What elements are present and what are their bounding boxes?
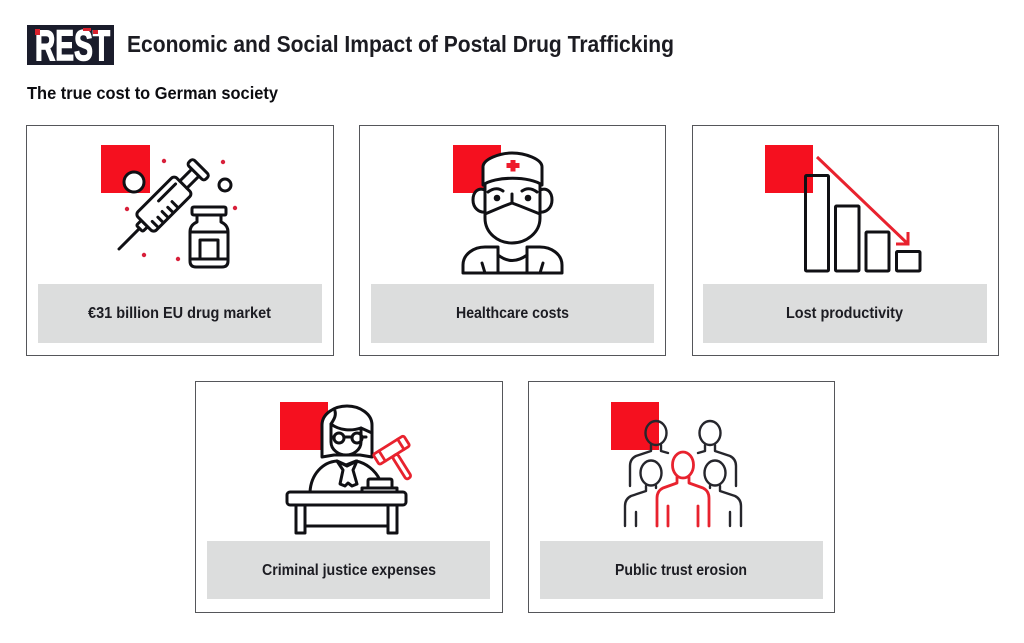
- panel: lost productivity: [692, 126, 998, 356]
- label bar: [540, 541, 823, 599]
- label: €31 billion EU drug market: [88, 305, 271, 322]
- icon: group of people: [611, 402, 741, 526]
- logo: REST: [27, 22, 114, 70]
- panel: public trust: [528, 382, 834, 612]
- subtitle: The true cost to German society: [27, 83, 278, 103]
- panel: criminal justice: [196, 382, 502, 612]
- label: Criminal justice expenses: [262, 562, 436, 579]
- label bar: [371, 284, 654, 343]
- label: Healthcare costs: [456, 305, 569, 322]
- panel: EU drug market: [26, 126, 334, 356]
- label: Lost productivity: [786, 305, 903, 322]
- label bar: [38, 284, 322, 343]
- panel: healthcare costs: [360, 126, 666, 356]
- icon: falling bar chart: [765, 145, 920, 271]
- logo: REST: REST: [35, 22, 110, 70]
- title: Economic and Social Impact of Postal Drug Trafficking: [127, 31, 674, 57]
- label: Public trust erosion: [615, 562, 747, 579]
- label bar: [703, 284, 987, 343]
- icon: syringe and vial: [101, 145, 237, 267]
- icon: masked medic: [453, 145, 562, 273]
- label bar: [207, 541, 490, 599]
- icon: judge with gavel: [280, 402, 424, 533]
